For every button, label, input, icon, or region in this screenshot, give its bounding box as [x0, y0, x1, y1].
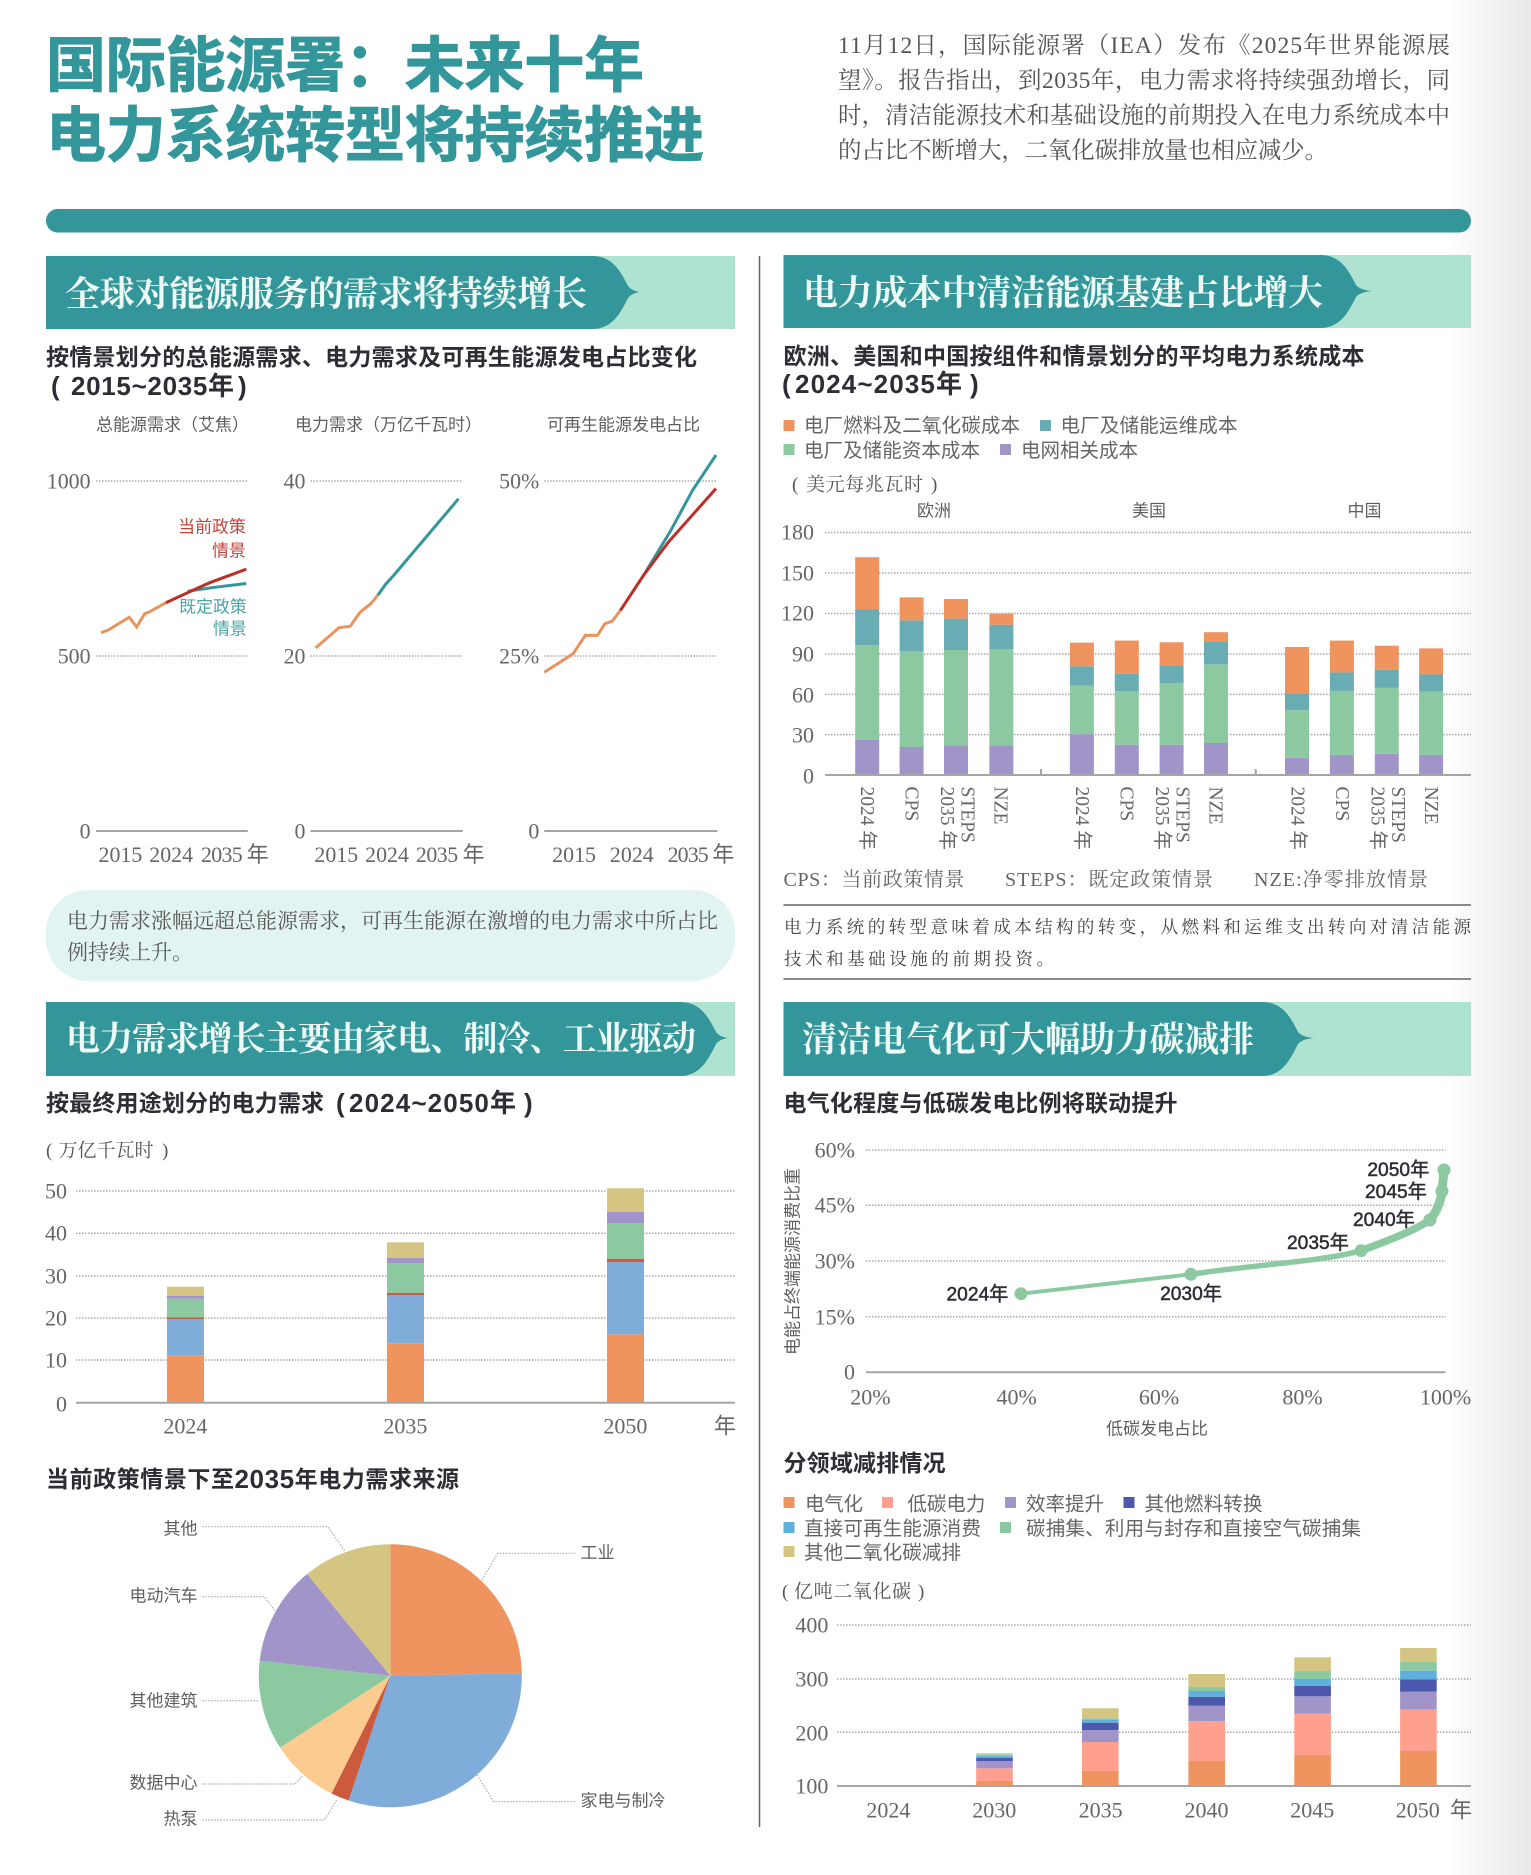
stacked bar chart: emission reductions: 100	[795, 1774, 828, 1798]
chart: electricity demand: 2035 年	[416, 842, 485, 867]
legend: 电厂及储能运维成本	[1060, 415, 1238, 437]
bars: United States	[1070, 632, 1228, 775]
stacked bar chart: demand by end use: 20	[45, 1306, 67, 1330]
vertical category labels: 2035 年	[1366, 786, 1388, 850]
stacked bar chart: demand by end use: 2024	[163, 1414, 207, 1438]
stacked bar chart: emission reductions: 400	[795, 1612, 828, 1638]
section header: 清洁电气化可大幅助力碳减排	[784, 1002, 1471, 1076]
stacked bar chart: emission reductions: 2030	[972, 1798, 1016, 1822]
pie chart: demand sources	[130, 1520, 666, 1828]
intro text: 11月12日，国际能源署（IEA）发布《2025年世界能源展	[838, 32, 1450, 59]
stacked bar chart: emission reductions: 300	[795, 1666, 828, 1692]
note with rules: 电力系统的转型意味着成本结构的转变，从燃料和运维支出转向对清洁能源	[784, 917, 1472, 937]
section header: 全球对能源服务的需求将持续增长: 全球对能源服务的需求将持续增长	[65, 275, 587, 314]
curve chart: electrification vs low-carbon share: 30%	[815, 1248, 855, 1274]
stacked bar chart: demand by end use: 万亿千瓦时	[58, 1140, 154, 1162]
note with rules	[784, 905, 1472, 979]
subheading: 分领域减排情况	[784, 1450, 946, 1476]
curve chart: electrification vs low-carbon share: 电能占终端能源消费比重	[784, 1168, 802, 1355]
stacked bar chart: demand by end use: 10	[45, 1348, 67, 1372]
subheading: 2024~2050年	[349, 1088, 516, 1118]
vertical category labels: STEPS	[956, 786, 978, 843]
chart: total energy demand: 1000	[47, 468, 91, 494]
chart: total energy demand: 情景	[213, 619, 247, 639]
year labels: 2050年	[1367, 1159, 1429, 1181]
vertical category labels: NZE	[1205, 786, 1226, 824]
stacked bar chart: system cost: 30	[792, 722, 814, 748]
legend	[784, 1494, 1361, 1564]
subheading: (	[51, 371, 60, 401]
callout: 电力需求涨幅远超总能源需求，可再生能源在激增的电力需求中所占比	[67, 909, 718, 934]
legend: 效率提升	[1026, 1494, 1104, 1516]
chart: renewable share: 25%	[499, 643, 539, 669]
stacked bar chart: demand by end use	[45, 1140, 736, 1438]
vertical category labels: STEPS	[1172, 786, 1193, 843]
stacked bar chart: demand by end use: )	[162, 1140, 168, 1162]
curve chart: electrification vs low-carbon share	[784, 1138, 1471, 1438]
chart: renewable share: 0	[528, 818, 539, 844]
chart: renewable share: 50%	[499, 468, 539, 494]
year labels: 2035年	[1287, 1232, 1349, 1254]
stacked bar chart: system cost: 180	[781, 520, 814, 544]
vertical category labels: CPS	[900, 786, 922, 821]
legend: 直接可再生能源消费	[804, 1518, 981, 1540]
pie labels: 数据中心	[130, 1774, 198, 1792]
legend: 低碳电力	[907, 1494, 985, 1516]
stacked bar chart: emission reductions: 2040	[1184, 1798, 1228, 1822]
column divider	[758, 256, 760, 1827]
stacked bar chart: emission reductions: (	[782, 1582, 788, 1602]
chart: renewable share: 可再生能源发电占比	[547, 416, 700, 434]
chart: electricity demand: 40	[284, 468, 305, 494]
pie labels: 家电与制冷	[580, 1792, 666, 1810]
vertical category labels: 2024 年	[1071, 786, 1093, 850]
stacked bar chart: demand by end use: 2035	[383, 1414, 427, 1438]
intro text	[838, 32, 1450, 164]
section header: 电力成本中清洁能源基建占比增大: 电力成本中清洁能源基建占比增大	[803, 274, 1323, 313]
year labels: 2040年	[1353, 1209, 1415, 1231]
pie labels: 工业	[580, 1544, 614, 1562]
chart: total energy demand: 当前政策	[178, 517, 246, 537]
bars: Europe	[855, 557, 1013, 775]
curve chart: electrification vs low-carbon share: 20%	[850, 1384, 891, 1410]
subheading: 按最终用途划分的电力需求	[46, 1090, 324, 1116]
subheading: 欧洲、美国和中国按组件和情景划分的平均电力系统成本	[784, 343, 1364, 369]
intro text: 的占比不断增大，二氧化碳排放量也相应减少。	[838, 137, 1328, 164]
curve chart: electrification vs low-carbon share: 15%	[815, 1304, 855, 1330]
stacked bar chart: demand by end use: 0	[56, 1392, 67, 1416]
subheading: 2024~2035年	[795, 369, 962, 399]
panel: electricity demand drivers	[45, 1002, 736, 1828]
stacked bar chart: emission reductions: 200	[795, 1720, 828, 1746]
panel: global energy demand	[46, 256, 735, 981]
intro text: 时，清洁能源技术和基础设施的前期投入在电力系统成本中	[838, 102, 1450, 129]
stacked bar chart: emission reductions	[782, 1580, 1472, 1822]
stacked bar chart: demand by end use: 30	[45, 1264, 67, 1288]
subheading	[46, 344, 697, 401]
subheading: )	[238, 371, 247, 401]
chart: total energy demand: 总能源需求（艾焦）	[96, 416, 249, 434]
callout: 例持续上升。	[67, 940, 193, 964]
subheading: (	[336, 1088, 345, 1118]
section header: 电力需求增长主要由家电、制冷、工业驱动: 电力需求增长主要由家电、制冷、工业驱动	[66, 1020, 696, 1058]
subheading: 按情景划分的总能源需求、电力需求及可再生能源发电占比变化	[46, 344, 697, 370]
chart: total energy demand: 500	[58, 643, 91, 669]
subheading: )	[524, 1088, 533, 1118]
vertical category labels: 2024 年	[1286, 786, 1308, 850]
stacked bar chart: demand by end use: 50	[45, 1178, 67, 1204]
legend: 其他燃料转换	[1144, 1494, 1262, 1516]
stacked bar chart: demand by end use: 40	[45, 1220, 67, 1246]
chart: total energy demand: 2024	[149, 842, 193, 867]
stacked bar chart: demand by end use: 年	[714, 1414, 736, 1438]
legend: 其他二氧化碳减排	[804, 1542, 961, 1564]
stacked bar chart: system cost: (	[792, 474, 798, 496]
panel: clean electrification	[782, 1002, 1472, 1822]
curve chart: electrification vs low-carbon share: 80%	[1282, 1384, 1323, 1410]
chart: total energy demand: 2035 年	[201, 842, 269, 867]
chart: total energy demand	[47, 416, 269, 867]
subheading: 当前政策情景下至2035年电力需求来源	[46, 1464, 459, 1494]
vertical category labels: NZE	[990, 786, 1010, 824]
vertical category labels: 2024 年	[856, 786, 878, 850]
vertical category labels: NZE	[1420, 786, 1441, 824]
chart: renewable share: 2035 年	[668, 842, 734, 867]
section header: 电力需求增长主要由家电、制冷、工业驱动	[46, 1002, 735, 1076]
stacked bar chart: emission reductions: 2050	[1396, 1798, 1440, 1822]
curve chart: electrification vs low-carbon share: 40%	[997, 1384, 1037, 1410]
stacked bar chart: emission reductions: 2045	[1290, 1798, 1334, 1822]
curve chart: electrification vs low-carbon share: 60%	[815, 1138, 855, 1162]
note with rules: 技术和基础设施的前期投资。	[784, 949, 1054, 969]
chart: renewable share: 2024	[610, 842, 654, 867]
chart: total energy demand: 0	[80, 818, 91, 844]
chart: total energy demand: 既定政策	[179, 597, 247, 617]
curve chart: electrification vs low-carbon share: 低碳发电占比	[1106, 1420, 1208, 1438]
chart: electricity demand: 电力需求（万亿千瓦时）	[295, 416, 482, 434]
stacked bar chart: emission reductions: 2035	[1079, 1798, 1123, 1822]
curve chart: electrification vs low-carbon share: 45%	[815, 1192, 855, 1218]
stacked bar chart: system cost: )	[931, 474, 937, 496]
chart: renewable share: 2015	[552, 842, 596, 867]
intro text: 望》。报告指出，到2035年，电力需求将持续强劲增长，同	[838, 67, 1450, 94]
chart: total energy demand: 2015	[99, 842, 142, 867]
year labels: 2030年	[1160, 1283, 1222, 1305]
stacked bar chart: system cost: 60	[792, 682, 814, 708]
vertical category labels: 2035 年	[1151, 786, 1173, 850]
chart: electricity demand	[284, 416, 485, 867]
chart: electricity demand: 20	[284, 643, 305, 669]
scenario key	[784, 868, 1428, 891]
subheading: )	[970, 369, 979, 399]
scenario key: STEPS：既定政策情景	[1005, 868, 1213, 891]
vertical category labels: STEPS	[1387, 786, 1408, 843]
chart: renewable share	[499, 416, 734, 867]
stacked bar chart: system cost: 美元每兆瓦时	[806, 474, 923, 496]
year labels: 2024年	[946, 1284, 1008, 1306]
chart: electricity demand: 0	[295, 818, 305, 844]
scenario key: CPS：当前政策情景	[784, 868, 964, 891]
stacked bar chart: emission reductions: 亿吨二氧化碳	[794, 1580, 911, 1602]
top divider bar	[46, 209, 1471, 232]
stacked bar chart: system cost: 美国	[1132, 502, 1166, 520]
stacked bar chart: system cost: 150	[781, 560, 814, 586]
callout	[46, 890, 735, 981]
chart: total energy demand: 情景	[212, 541, 246, 561]
legend: 电厂及储能资本成本	[804, 440, 980, 462]
chart: electricity demand: 2024	[365, 842, 409, 867]
section header: 清洁电气化可大幅助力碳减排: 清洁电气化可大幅助力碳减排	[802, 1020, 1254, 1060]
title	[46, 32, 704, 170]
curve chart: electrification vs low-carbon share: 60%	[1139, 1384, 1179, 1410]
stacked bar chart: system cost: 0	[803, 764, 814, 788]
subheading	[46, 1088, 533, 1118]
curve chart: electrification vs low-carbon share: 0	[844, 1360, 855, 1384]
legend: 碳捕集、利用与封存和直接空气碳捕集	[1026, 1518, 1361, 1540]
stacked bar chart: emission reductions: )	[918, 1582, 924, 1602]
chart: electricity demand: 2015	[314, 842, 358, 867]
stacked bar chart: demand by end use: 2050	[603, 1414, 647, 1438]
year labels	[946, 1159, 1429, 1306]
curve chart: electrification vs low-carbon share: 100%	[1420, 1384, 1471, 1410]
vertical category labels: CPS	[1331, 786, 1352, 821]
bars: China	[1285, 641, 1443, 775]
subheading	[782, 343, 1364, 399]
subheading: 2015~2035年	[71, 371, 234, 401]
vertical category labels	[856, 786, 1441, 850]
stacked bar chart: system cost: 欧洲	[917, 502, 951, 520]
stacked bar chart: system cost: 90	[792, 642, 814, 666]
title: 国际能源署：未来十年	[46, 32, 644, 100]
legend	[784, 415, 1238, 462]
stacked bar chart: system cost	[781, 474, 1471, 850]
pie labels: 电动汽车	[130, 1586, 198, 1606]
stacked bar chart: emission reductions: 2024	[866, 1798, 910, 1822]
subheading: (	[782, 369, 791, 399]
panel: power system cost	[781, 255, 1472, 979]
pie labels	[130, 1520, 666, 1828]
stacked bar chart: system cost: 中国	[1348, 502, 1382, 520]
legend: 电厂燃料及二氧化碳成本	[804, 415, 1020, 437]
scenario key: NZE:净零排放情景	[1254, 868, 1428, 891]
legend: 电气化	[805, 1494, 863, 1516]
stacked bar chart: demand by end use: (	[46, 1140, 52, 1162]
legend: 电网相关成本	[1021, 440, 1138, 462]
stacked bar chart: system cost: 120	[781, 600, 814, 626]
section header: 全球对能源服务的需求将持续增长	[46, 256, 735, 329]
year labels: 2045年	[1365, 1181, 1427, 1203]
section header: 电力成本中清洁能源基建占比增大	[784, 255, 1471, 328]
pie labels: 其他	[164, 1520, 198, 1538]
title: 电力系统转型将持续推进	[46, 102, 704, 170]
subheading: 电气化程度与低碳发电比例将联动提升	[784, 1090, 1178, 1116]
pie labels: 热泵	[164, 1810, 198, 1828]
vertical category labels: CPS	[1116, 786, 1137, 821]
stacked bar chart: emission reductions: 年	[1450, 1798, 1472, 1822]
pie labels: 其他建筑	[130, 1692, 198, 1710]
vertical category labels: 2035 年	[936, 786, 958, 850]
